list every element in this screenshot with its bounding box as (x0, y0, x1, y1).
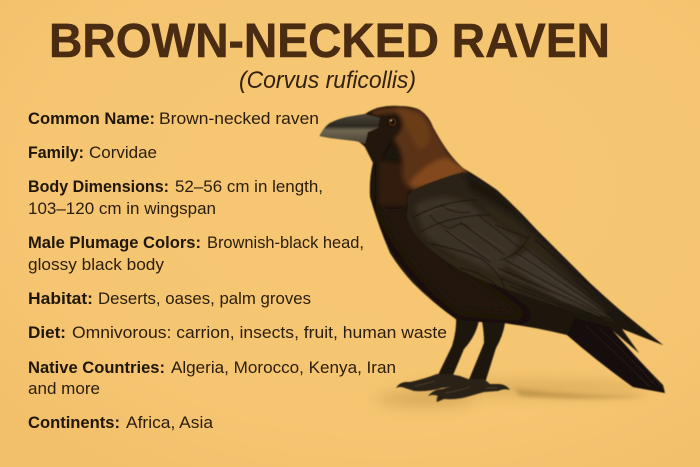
illustration: raven (320, 106, 670, 402)
dark back band (463, 172, 663, 345)
fact: body dimensions: 52–56 cm in length, (175, 177, 323, 196)
fact: diet: Diet: (28, 323, 66, 342)
neck tint (378, 160, 412, 205)
ground shadow (375, 381, 650, 406)
fact: male plumage colors: glossy black body (28, 255, 165, 274)
fact: body dimensions: Body Dimensions: (28, 177, 169, 196)
fact: native countries (28, 358, 396, 398)
brown collar (410, 158, 470, 188)
primary sheen (505, 250, 610, 315)
fact list (28, 109, 447, 432)
scientific name: (Corvus ruficollis) (239, 67, 416, 94)
grey covert sheen (415, 198, 520, 275)
fact: family: Corvidae (89, 143, 157, 162)
raven legs and feet (396, 316, 510, 402)
plumage shading, clipped to silhouette (362, 107, 665, 393)
fact: common name (28, 109, 319, 128)
fact: common name: Brown-necked raven (159, 109, 319, 128)
raven wing (406, 172, 663, 346)
fact: male plumage colors: Brownish-black head, (207, 233, 364, 252)
warm body tint (376, 205, 530, 318)
fact: common name: Common Name: (28, 109, 155, 128)
raven body (320, 106, 665, 393)
fact: body dimensions: 103–120 cm in wingspan (28, 199, 216, 218)
fact: male plumage colors (28, 233, 364, 274)
fact: native countries: Algeria, Morocco, Kenya, Iran (171, 358, 396, 377)
fact: family: Family: (28, 143, 84, 162)
fact: continents (28, 413, 214, 432)
fact: family (28, 143, 157, 162)
fact: male plumage colors: Male Plumage Colors: (28, 233, 201, 252)
fact: habitat: Habitat: (28, 289, 93, 308)
raven beak (320, 114, 380, 144)
feather lines (412, 200, 650, 335)
crown highlight (392, 108, 430, 150)
fact: continents: Africa, Asia (126, 413, 214, 432)
fact: continents: Continents: (28, 413, 120, 432)
fact: native countries: Native Countries: (28, 358, 165, 377)
fact: native countries: and more (28, 379, 100, 398)
fact: habitat: Deserts, oases, palm groves (98, 289, 311, 308)
dark face around beak and eye (362, 116, 400, 165)
fact: diet: Omnivorous: carrion, insects, fruit, human waste (72, 323, 447, 342)
raven eye (387, 116, 398, 128)
fact: body dimensions (28, 177, 323, 218)
head brown (372, 107, 466, 190)
raven tail (567, 318, 665, 393)
title: BROWN-NECKED RAVEN (49, 15, 610, 68)
